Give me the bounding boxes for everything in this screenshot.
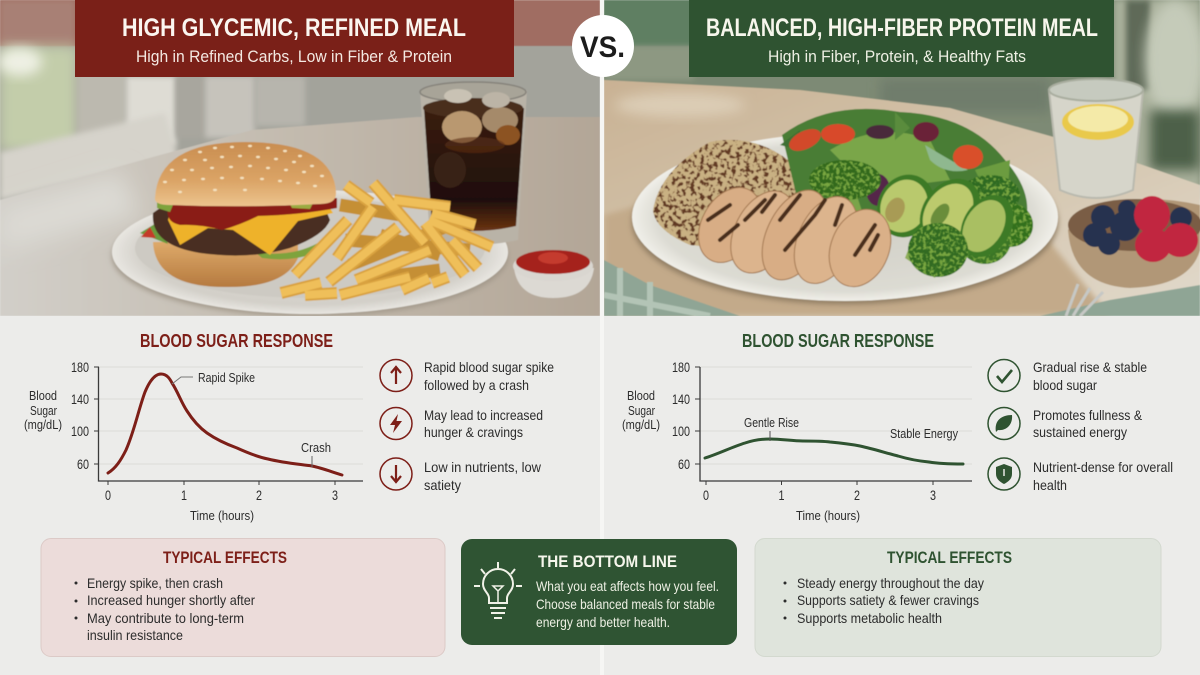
bullet list: Increased hunger shortly after [87,592,255,608]
chart: right blood sugar stable [622,359,972,523]
text: fullness note: sustained energy [1033,424,1127,440]
bullet list: May contribute to long-term [87,610,244,626]
napkin right [1040,285,1200,316]
berry bowl [1068,199,1200,288]
bullet list: Supports metabolic health [797,610,942,626]
icon: lightning bolt [380,408,412,440]
chicken slices [698,186,892,288]
text: hunger note [424,407,543,440]
text: nutrients note [424,459,542,493]
text: spike note: Rapid blood sugar spike [424,359,554,375]
ketchup bowl [514,268,594,298]
bullet list [784,575,984,626]
chart: left blood sugar spike: 2 [256,487,262,503]
broccoli [809,160,1033,264]
chart: left blood sugar spike: 140 [71,391,89,407]
chart: right blood sugar stable: Gentle Rise [744,415,799,430]
icon: leaf [988,408,1020,440]
chart: right blood sugar stable: 140 [672,391,690,407]
heading: TYPICAL EFFECTS [887,548,1012,567]
chart: left blood sugar spike: 0 [105,487,111,503]
text: nutrient-dense note: health [1033,477,1067,493]
chart: right blood sugar stable: 3 [930,487,936,503]
bullet list: Energy spike, then crash [87,575,223,591]
photo: burger, fries and cola meal [0,0,600,316]
patty [153,208,330,256]
body text: Choose balanced meals for stable [536,596,715,612]
bottom bun [153,240,298,287]
body text: What you eat affects how you feel. [536,578,719,594]
header: high glycemic meal [75,0,514,77]
napkin left [604,260,740,316]
icon: up arrow [380,360,412,392]
grill marks [708,195,878,255]
chart: right blood sugar stable: (mg/dL) [622,417,660,432]
title: HIGH GLYCEMIC, REFINED MEAL [122,14,466,42]
chart: left blood sugar spike: 3 [332,487,338,503]
VS badge: VS. [580,31,625,64]
fork [1066,284,1103,316]
text: fullness note [1033,407,1143,440]
chart: left blood sugar spike [24,359,363,523]
chart: right blood sugar stable: Time (hours) [796,508,860,523]
text: hunger note: hunger & cravings [424,424,523,440]
chart: left blood sugar spike: Time (hours) [190,508,254,523]
text: hunger note: May lead to increased [424,407,543,423]
chart: left blood sugar spike: 100 [71,423,89,439]
fries [281,183,492,295]
stable curve [705,439,963,464]
chart: right blood sugar stable: 180 [672,359,690,375]
center divider [600,0,604,675]
panel: the bottom line [461,539,737,645]
heading: THE BOTTOM LINE [538,552,677,571]
top bun [155,142,336,206]
chart: right blood sugar stable: Blood [627,388,655,403]
heading: TYPICAL EFFECTS [163,548,287,567]
text: nutrient-dense note [1033,459,1173,493]
icon: light bulb [474,562,522,618]
bullet list: Steady energy throughout the day [797,575,984,591]
chart: left blood sugar spike: 60 [77,456,89,472]
text: nutrients note: Low in nutrients, low [424,459,542,475]
avocado slices [876,174,1014,258]
icon: shield [988,458,1020,490]
cheese [168,208,333,255]
text: gradual note: Gradual rise & stable [1033,359,1147,375]
spike curve [108,374,342,475]
subtitle: High in Fiber, Protein, & Healthy Fats [768,47,1026,66]
plate [110,246,509,316]
title: BALANCED, HIGH-FIBER PROTEIN MEAL [706,14,1098,42]
panel: left typical effects [41,538,445,656]
chart: right blood sugar stable: Sugar [628,403,656,418]
ketchup [168,198,337,230]
chart: left blood sugar spike: Crash [301,440,331,455]
VS badge [572,15,634,77]
chart: left blood sugar spike: Rapid Spike [198,370,255,385]
icon: down arrow [380,458,412,490]
chart: right blood sugar stable: 60 [678,456,690,472]
salad greens [782,108,1028,212]
text: spike note [424,359,554,393]
body text [536,578,719,630]
body text: energy and better health. [536,614,670,630]
chart: left blood sugar spike: (mg/dL) [24,417,62,432]
subtitle: High in Refined Carbs, Low in Fiber & Protein [136,47,452,66]
panel: right typical effects [755,538,1161,656]
plate [630,202,1062,307]
broccoli front [905,223,968,278]
text: nutrient-dense note: Nutrient-dense for overall [1033,459,1173,475]
text: gradual note: blood sugar [1033,377,1097,393]
chart: right blood sugar stable: 100 [672,423,690,439]
text: nutrients note: satiety [424,477,461,493]
water glass [1049,90,1143,198]
chart: left blood sugar spike: Sugar [30,403,58,418]
text: spike note: followed by a crash [424,377,529,393]
icon: check mark [988,360,1020,392]
chart: left blood sugar spike: 1 [181,487,187,503]
text: fullness note: Promotes fullness & [1033,407,1143,423]
text: gradual note [1033,359,1147,393]
photo: chicken, quinoa and salad meal [604,0,1200,316]
chart: right blood sugar stable: Stable Energy [890,426,958,441]
bullet list: Supports satiety & fewer cravings [797,592,979,608]
bullet list: insulin resistance [87,627,183,643]
heading: right blood sugar response: BLOOD SUGAR RESPONSE [742,331,934,351]
lettuce [140,222,168,244]
chart: left blood sugar spike: Blood [29,388,57,403]
chart: right blood sugar stable: 0 [703,487,709,503]
cola glass [420,90,527,245]
heading: left blood sugar response: BLOOD SUGAR RESPONSE [140,331,333,351]
header: balanced meal [689,0,1114,77]
chart: right blood sugar stable: 2 [854,487,860,503]
bullet list [74,575,255,643]
chart: left blood sugar spike: 180 [71,359,89,375]
quinoa [653,140,808,250]
chart: right blood sugar stable: 1 [778,487,785,503]
sesame seeds [163,145,324,193]
